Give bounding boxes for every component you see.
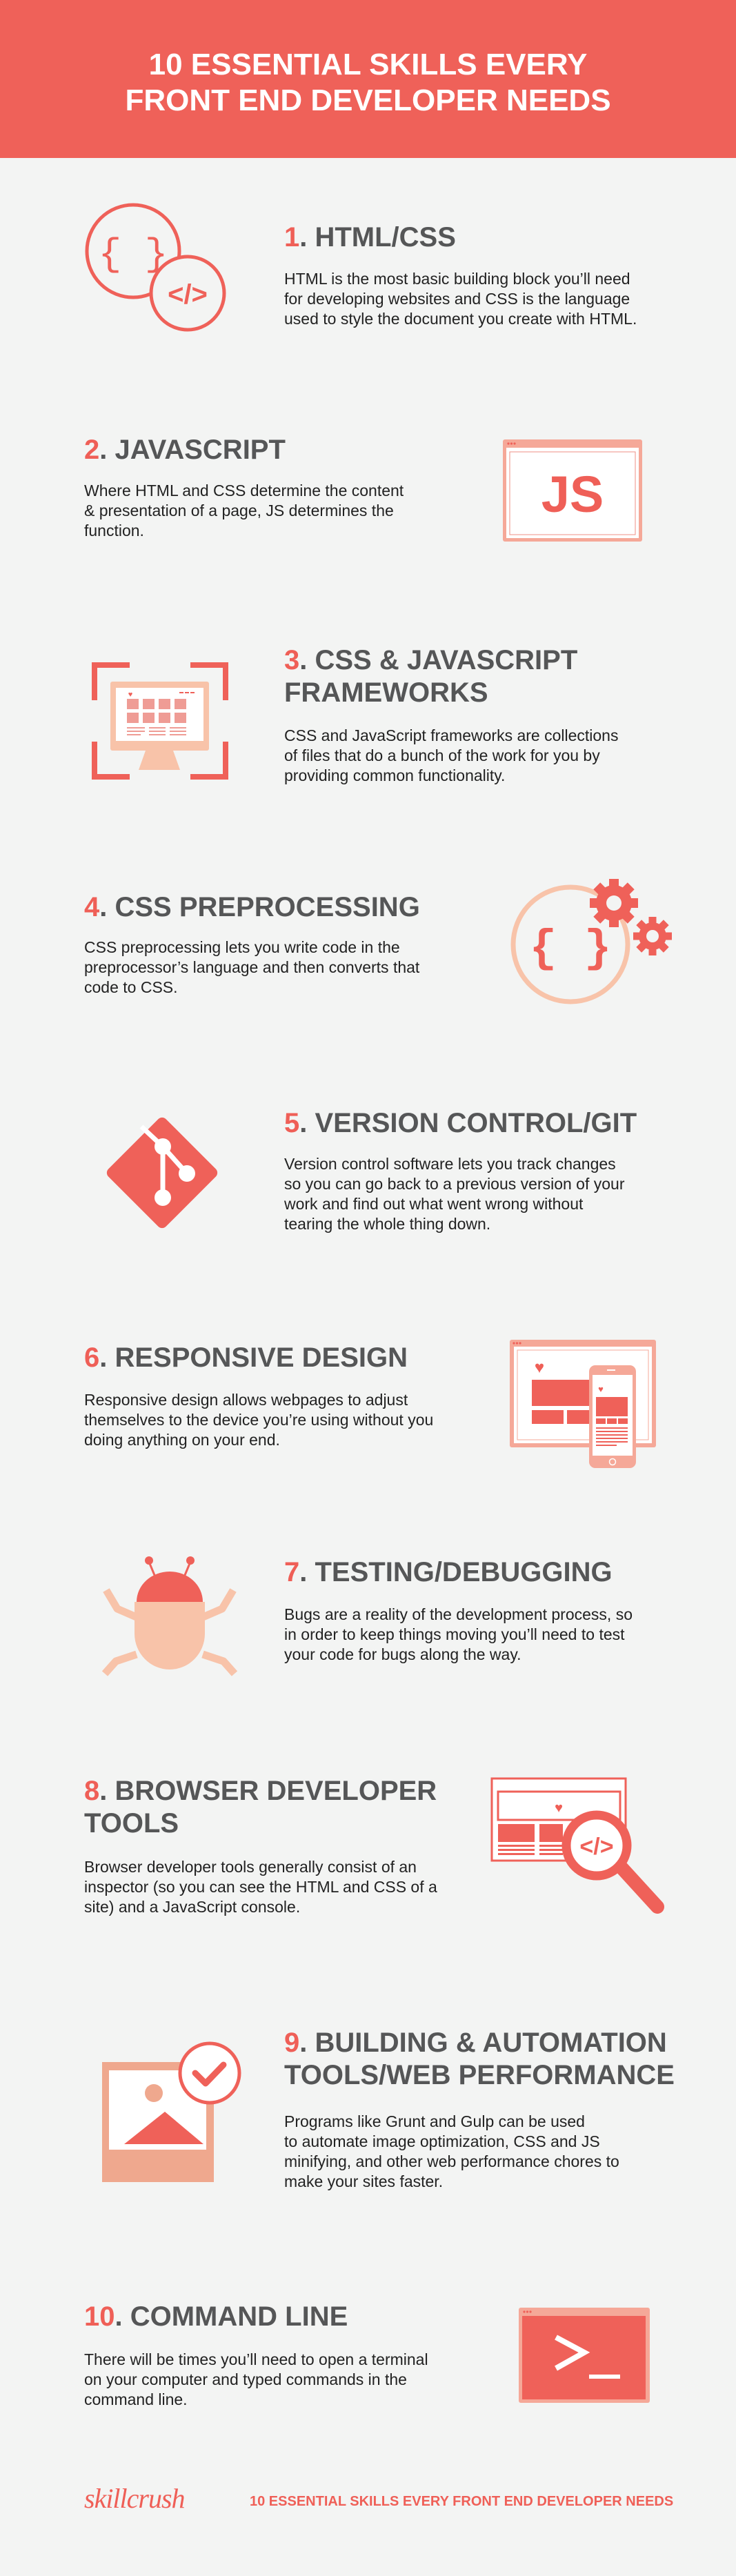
icon: frameworks monitor: ♥ [128, 691, 132, 699]
heading 3: FRAMEWORKS [284, 677, 488, 708]
text 4: preprocessor’s language and then converts that [84, 958, 419, 976]
icon: preprocessing gears: { } [530, 923, 611, 975]
heading 7: 7. TESTING/DEBUGGING [284, 1557, 613, 1587]
text 3: CSS and JavaScript frameworks are collections [284, 726, 618, 744]
text 10: There will be times you’ll need to open a terminal [84, 2350, 428, 2368]
icon: JS window [503, 439, 642, 542]
text 3: of files that do a bunch of the work for you by [284, 746, 600, 764]
heading 1: 1. HTML/CSS [284, 222, 456, 252]
text 5: Version control software lets you track changes [284, 1155, 616, 1173]
heading 4: 4. CSS PREPROCESSING [84, 892, 420, 922]
text 8 [84, 1858, 437, 1916]
text 9: make your sites faster. [284, 2172, 443, 2190]
text 6: Responsive design allows webpages to adjust [84, 1391, 408, 1409]
heading 10: 10. COMMAND LINE [84, 2301, 348, 2332]
text 5: tearing the whole thing down. [284, 1215, 490, 1233]
text 2 [84, 482, 404, 539]
text 7 [284, 1605, 633, 1663]
heading 2: 2. JAVASCRIPT [84, 435, 286, 465]
icon: responsive devices: ♥ [535, 1358, 544, 1377]
icon: bug [102, 1556, 237, 1676]
heading 6: 6. RESPONSIVE DESIGN [84, 1343, 408, 1373]
icon: html css circles: { } [99, 232, 168, 277]
text 9 [284, 2112, 619, 2190]
text 2: & presentation of a page, JS determines the [84, 502, 394, 519]
text 5: so you can go back to a previous version of your [284, 1175, 625, 1193]
text 1: for developing websites and CSS is the language [284, 290, 630, 308]
text 10: command line. [84, 2390, 188, 2408]
text 2: function. [84, 522, 144, 539]
text 2: Where HTML and CSS determine the content [84, 482, 404, 499]
heading 3 [284, 645, 577, 708]
heading 8: TOOLS [84, 1808, 179, 1839]
header banner [0, 0, 736, 158]
text 8: Browser developer tools generally consist of an [84, 1858, 417, 1876]
heading 9 [284, 2028, 675, 2090]
icon: image optimization [102, 2042, 241, 2182]
text 9: minifying, and other web performance chores to [284, 2152, 619, 2170]
text 10: on your computer and typed commands in the [84, 2370, 407, 2388]
text 5: work and find out what went wrong without [284, 1195, 583, 1213]
footer title: 10 ESSENTIAL SKILLS EVERY FRONT END DEVELOPER NEEDS [250, 2494, 673, 2509]
icon: browser inspector [491, 1777, 664, 1914]
text 6: themselves to the device you’re using without you [84, 1411, 433, 1429]
text 4: CSS preprocessing lets you write code in the [84, 938, 400, 956]
heading 8 [84, 1776, 437, 1839]
text 1: HTML is the most basic building block you’ll need [284, 270, 630, 288]
text 7: your code for bugs along the way. [284, 1645, 521, 1663]
text 8: site) and a JavaScript console. [84, 1898, 300, 1916]
text 3 [284, 726, 618, 784]
text 4 [84, 938, 419, 996]
text 1 [284, 270, 637, 328]
title: 10 ESSENTIAL SKILLS EVERY [149, 48, 587, 81]
icon: frameworks monitor [92, 662, 228, 780]
icon: responsive devices: ♥ [598, 1384, 604, 1394]
text 6 [84, 1391, 433, 1449]
text 8: inspector (so you can see the HTML and CSS of a [84, 1878, 437, 1896]
heading 3: 3. CSS & JAVASCRIPT [284, 645, 577, 675]
text 9: to automate image optimization, CSS and JS [284, 2132, 600, 2150]
icon: JS window: JS [541, 466, 604, 523]
icon: browser inspector: </> [579, 1834, 614, 1860]
heading 5: 5. VERSION CONTROL/GIT [284, 1108, 637, 1138]
heading 9: 9. BUILDING & AUTOMATION [284, 2028, 667, 2058]
icon: html css circles: </> [168, 279, 208, 310]
text 6: doing anything on your end. [84, 1431, 280, 1449]
title [125, 48, 611, 117]
icon: browser inspector: ♥ [555, 1801, 563, 1816]
text 3: providing common functionality. [284, 766, 505, 784]
text 4: code to CSS. [84, 978, 178, 996]
icon: responsive devices [510, 1340, 656, 1468]
icon: terminal [519, 2308, 650, 2403]
text 7: in order to keep things moving you’ll need to test [284, 1625, 625, 1643]
text 5 [284, 1155, 625, 1233]
heading 9: TOOLS/WEB PERFORMANCE [284, 2060, 675, 2090]
icon: preprocessing gears [510, 879, 672, 1004]
text 10 [84, 2350, 428, 2408]
footer logo: skillcrush [84, 2483, 185, 2514]
icon: html css circles [86, 203, 226, 331]
text 9: Programs like Grunt and Gulp can be used [284, 2112, 585, 2130]
text 7: Bugs are a reality of the development process, so [284, 1605, 633, 1623]
heading 8: 8. BROWSER DEVELOPER [84, 1776, 437, 1806]
icon: git diamond [106, 1118, 218, 1228]
text 1: used to style the document you create with HTML. [284, 310, 637, 328]
title: FRONT END DEVELOPER NEEDS [125, 83, 611, 117]
